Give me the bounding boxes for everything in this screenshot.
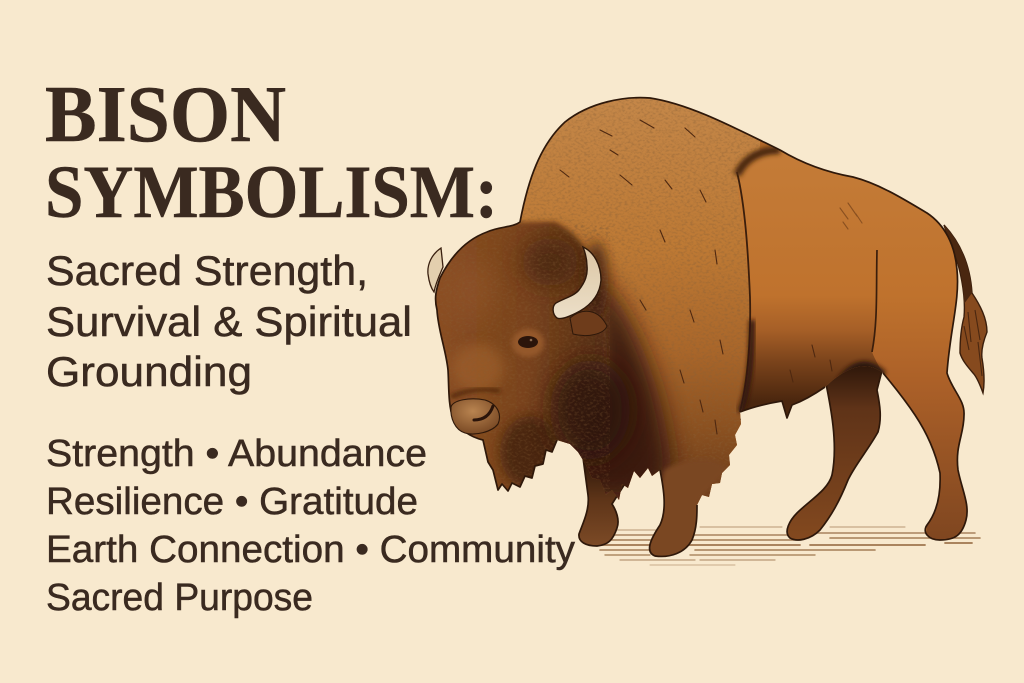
- near ear: [570, 311, 607, 336]
- silhouette outline: [436, 98, 967, 556]
- themes list: Earth Connection • Community: [46, 529, 575, 571]
- head mass: [430, 222, 606, 500]
- mane base: [521, 98, 760, 505]
- bison illustration: [420, 90, 987, 570]
- subtitle: Survival & Spiritual: [46, 298, 412, 345]
- themes list: Resilience • Gratitude: [46, 481, 418, 523]
- themes list: Strength • Abundance: [46, 433, 427, 475]
- subtitle: Sacred Strength,: [46, 247, 368, 294]
- far foreleg: [579, 450, 640, 546]
- head texture: [488, 225, 610, 494]
- front leg: [652, 462, 727, 556]
- neck shadow: [560, 270, 672, 500]
- ground hatching: [592, 527, 980, 565]
- hip crease: [872, 250, 877, 352]
- body, mane and head: [420, 90, 975, 570]
- rear body: [738, 140, 890, 420]
- eye: [512, 329, 544, 357]
- far hind leg: [787, 355, 886, 540]
- near horn: [553, 247, 601, 319]
- belly dark patch: [835, 358, 888, 378]
- subtitle: [46, 247, 412, 395]
- themes list: [46, 433, 575, 619]
- subtitle: Grounding: [46, 348, 252, 395]
- far horn: [428, 248, 443, 292]
- title: [45, 71, 498, 234]
- flank hair: [840, 203, 862, 229]
- mane edge: [737, 172, 750, 412]
- themes list: Sacred Purpose: [46, 577, 313, 619]
- tail: [944, 225, 987, 393]
- hind leg: [872, 193, 966, 540]
- title: BISON: [45, 71, 286, 159]
- title: SYMBOLISM:: [45, 151, 498, 234]
- brow and muzzle line: [451, 390, 500, 397]
- hair strokes: [559, 119, 832, 434]
- fur texture on mane: [522, 98, 760, 494]
- nose: [451, 399, 499, 434]
